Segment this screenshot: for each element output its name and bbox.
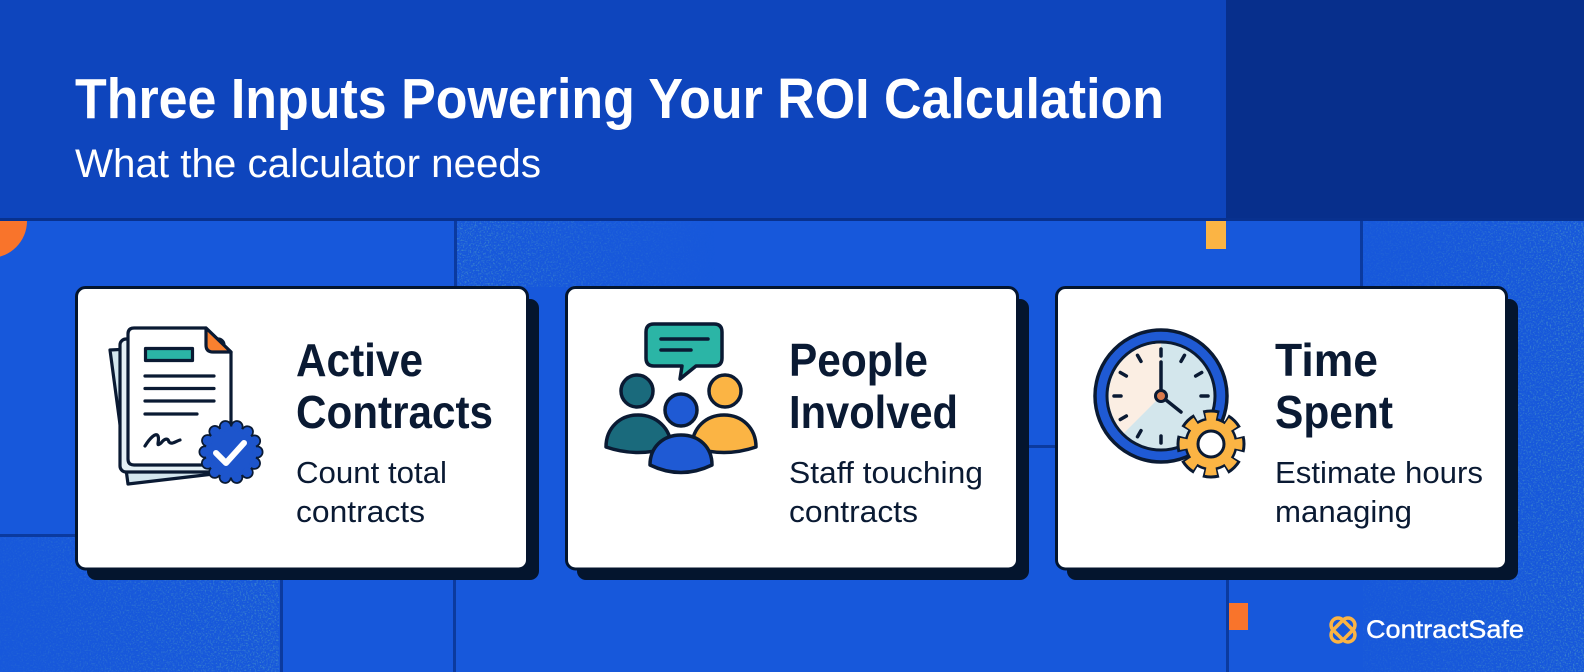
description: managing [1275, 494, 1412, 529]
description [789, 455, 983, 529]
description: contracts [296, 494, 425, 529]
subtitle: What the calculator needs [75, 142, 541, 186]
description: contracts [789, 494, 918, 529]
description: Estimate hours [1275, 455, 1483, 490]
description [1275, 455, 1483, 529]
heading: Involved [789, 386, 958, 438]
heading: Active [296, 334, 423, 386]
panel: people involved [566, 288, 1029, 580]
description: Count total [296, 455, 447, 490]
icon: people with speech bubble [606, 324, 756, 472]
background [0, 221, 1584, 672]
description: Staff touching [789, 455, 983, 490]
title: Three Inputs Powering Your ROI Calculation [75, 67, 1164, 131]
heading [296, 334, 493, 438]
heading: Spent [1275, 386, 1393, 438]
panel: time spent [1056, 288, 1518, 580]
icon: contract document with badge [110, 328, 259, 484]
panel: active contracts [76, 288, 539, 580]
header band [0, 0, 1584, 221]
logo: ContractSafe [1328, 615, 1524, 645]
description [296, 455, 447, 529]
icon: clock with gear [1095, 330, 1238, 471]
accent: orange quarter circle [0, 184, 27, 258]
wordmark: ContractSafe [1366, 616, 1524, 644]
heading: Contracts [296, 386, 493, 438]
heading: Time [1275, 334, 1378, 386]
accent: yellow block [1206, 221, 1226, 249]
icon: logo mark [1328, 615, 1358, 645]
heading [1275, 334, 1393, 438]
heading: People [789, 334, 928, 386]
accent: orange block [1229, 603, 1248, 630]
heading [789, 334, 958, 438]
